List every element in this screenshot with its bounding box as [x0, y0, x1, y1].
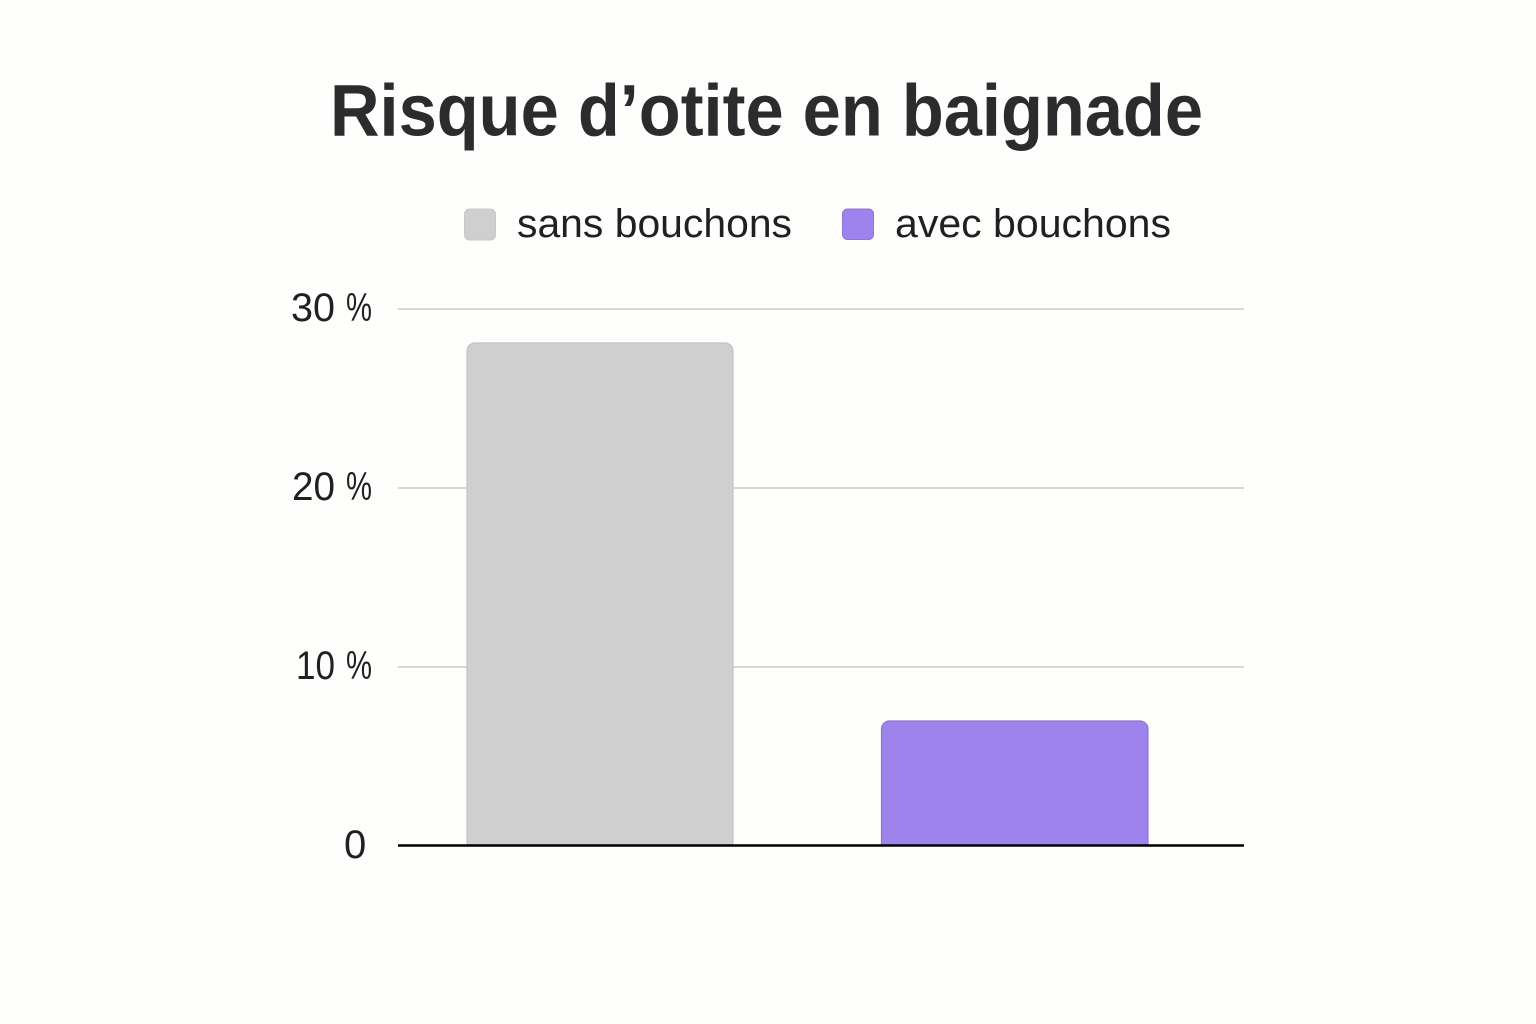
title: Risque d’otite en baignade	[330, 70, 1203, 152]
bar: avec bouchons 7 %	[882, 721, 1148, 845]
x axis baseline	[398, 844, 1244, 847]
bar chart	[291, 286, 1244, 867]
legend label: avec bouchons: avec bouchons	[895, 202, 1171, 246]
y label 30 %: 30	[291, 286, 335, 330]
y label 20 %: 20	[292, 465, 335, 509]
legend label: sans bouchons: sans bouchons	[517, 202, 792, 246]
y label 0: 0	[344, 823, 366, 867]
legend swatch: sans bouchons	[464, 209, 496, 240]
bar: sans bouchons 28 %	[467, 343, 733, 845]
y axis labels	[291, 286, 372, 867]
legend swatch: avec bouchons	[842, 209, 874, 240]
y label 10 %: 10	[296, 644, 335, 688]
y label 10 %: %	[346, 644, 372, 688]
y label 20 %	[292, 465, 372, 509]
y label 20 %: %	[346, 465, 372, 509]
y label 10 %	[296, 644, 372, 688]
legend	[464, 202, 1171, 246]
y label 30 %: %	[346, 286, 372, 330]
y label 30 %	[291, 286, 372, 330]
